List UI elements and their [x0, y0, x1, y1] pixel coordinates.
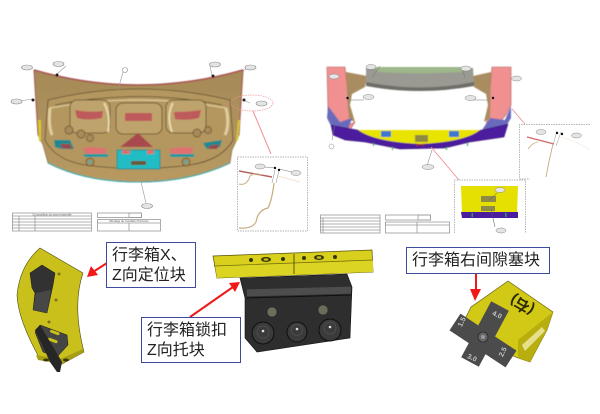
- table: right montage: [385, 215, 450, 233]
- part: right clearance block: 3.0: [466, 353, 478, 364]
- part: latch support block: [213, 250, 373, 352]
- detail circle and leader: [231, 95, 273, 154]
- label: clearance block: [406, 247, 550, 274]
- label: latch support: Z向托块: [147, 342, 205, 359]
- dark block upper: [30, 265, 55, 313]
- inset: yellow latch detail: [431, 147, 526, 233]
- yellow side strips: [38, 120, 41, 142]
- part: right clearance block: [455, 281, 553, 364]
- panel: rear opening drawing: [327, 67, 511, 150]
- yellow bar: [213, 250, 373, 278]
- part: right clearance block: 4.0: [491, 310, 503, 321]
- callouts: trunk lid: [11, 62, 267, 208]
- round features: [65, 126, 212, 166]
- table: left composition: Composition du sous-ensemble: [32, 212, 72, 216]
- table: left montage: Montage de Condition Parcours: [109, 219, 149, 223]
- label: latch support: [141, 317, 241, 363]
- panel: trunk lid drawing: [34, 70, 243, 182]
- inset: side section: [512, 109, 590, 179]
- label: locating block: 行李箱X、: [112, 247, 187, 264]
- trunk lid body: [34, 70, 243, 182]
- block lettering: (右): [507, 291, 537, 318]
- table: left composition: [12, 212, 92, 231]
- label: latch support: 行李箱锁扣: [147, 322, 227, 339]
- part: left yellow locating block: [17, 248, 84, 372]
- label: clearance block: 行李箱右间隙塞块: [412, 252, 540, 269]
- inset: trunk lid section: [238, 157, 308, 231]
- dark block lower: [35, 325, 68, 357]
- teal latch plate: [117, 150, 160, 169]
- arrow: to clearance block: [470, 273, 481, 301]
- arrow: to latch support: [190, 282, 240, 317]
- teal side pockets: [54, 140, 74, 149]
- opening surround: [327, 67, 511, 150]
- part: right clearance block: 1.5: [457, 316, 468, 328]
- callouts: rear opening: [329, 64, 522, 170]
- arrow: to locating block: [87, 263, 107, 277]
- table: right composition: [320, 215, 380, 233]
- part: right clearance block: 2.5: [498, 346, 509, 358]
- shim cross: [455, 306, 511, 362]
- label: locating block: [106, 242, 196, 288]
- red pads: [75, 110, 201, 156]
- label: locating block: Z向定位块: [112, 267, 186, 284]
- table: left montage: [97, 213, 160, 231]
